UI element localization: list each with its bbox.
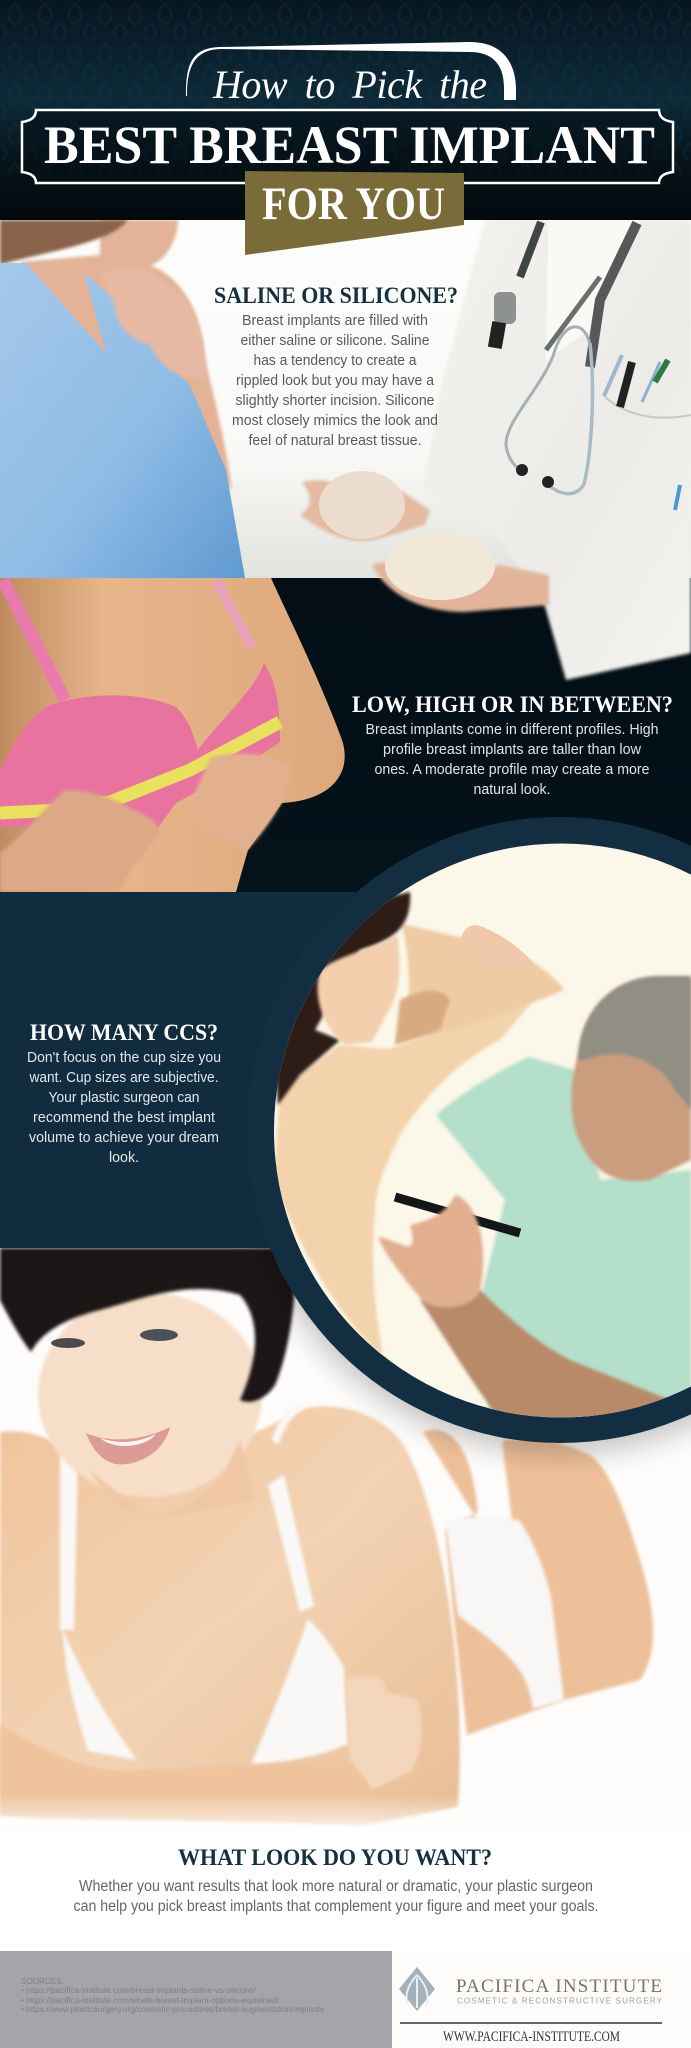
surgeon head (571, 978, 691, 1181)
right hand (190, 754, 291, 850)
body copy: Don't focus on the cup size you (27, 1049, 221, 1066)
eyes and mouth (51, 1329, 178, 1464)
script line: How to Pick the (212, 62, 487, 107)
body copy: volume to achieve your dream (29, 1129, 219, 1146)
left hand (0, 790, 159, 892)
text block: saline or silicone (214, 283, 458, 449)
surgeon forearm (420, 1290, 670, 1420)
body copy (27, 1049, 221, 1166)
text block: low, high or in between (352, 692, 673, 798)
body copy: profile breast implants are taller than low (383, 741, 641, 758)
body copy: feel of natural breast tissue. (248, 432, 422, 449)
body copy: ones. A moderate profile may create a more (374, 761, 650, 778)
body copy (74, 1878, 598, 1915)
photo: nurse in blue scrubs (0, 220, 245, 578)
measuring tape (0, 722, 280, 813)
skin (0, 578, 345, 892)
panel: section two dark background (0, 578, 691, 892)
marker pen (395, 1197, 520, 1233)
hair (0, 220, 128, 265)
sources list: • https://www.plasticsurgery.org/cosmetic-procedures/breast-augmentation/implants (21, 2004, 324, 2014)
sources list (21, 1976, 324, 2014)
body copy: either saline or silicone. Saline (240, 332, 430, 349)
panel: section one photo background (0, 220, 691, 578)
text block: what look do you want (74, 1845, 598, 1915)
body copy: rippled look but you may have a (236, 372, 435, 389)
body copy: has a tendency to create a (254, 352, 417, 369)
far arm (395, 991, 450, 1045)
body copy: recommend the best implant (33, 1109, 216, 1126)
hair (0, 1248, 296, 1402)
gold banner (245, 171, 464, 255)
hand (100, 267, 207, 379)
surgeon hair (578, 976, 691, 1110)
title plaque: best breast implant (22, 110, 673, 183)
body copy (232, 312, 438, 449)
body copy: natural look. (474, 781, 550, 798)
smooth implant (319, 471, 405, 539)
surgeon hand (378, 1195, 483, 1307)
body copy (366, 721, 658, 798)
straps (3, 580, 65, 700)
body copy: Your plastic surgeon can (48, 1089, 200, 1106)
pocket and pens (604, 355, 691, 510)
stethoscope (488, 222, 637, 494)
body copy: can help you pick breast implants that complement your figure and meet your goals. (74, 1898, 598, 1915)
heading: SALINE OR SILICONE? (214, 283, 458, 308)
hand on arm (460, 925, 533, 964)
torso and arm (0, 1406, 460, 1825)
body copy: Whether you want results that look more natural or dramatic, your plastic surgeon (79, 1878, 593, 1895)
hand holding smooth implant (300, 480, 430, 541)
white briefs (445, 1516, 564, 1709)
photo: smiling woman lying on a bed (0, 1248, 656, 1826)
patient back (274, 990, 542, 1356)
panel: how many ccs (0, 892, 400, 1248)
legs (423, 1430, 653, 1735)
heading: HOW MANY CCS? (30, 1020, 218, 1045)
shirt (546, 220, 640, 360)
body copy: slightly shorter incision. Silicone (236, 392, 434, 409)
logo name: PACIFICA INSTITUTE (456, 1976, 662, 1997)
bed fade (0, 1798, 458, 1828)
body copy: want. Cup sizes are subjective. (29, 1069, 218, 1086)
divider (400, 2022, 662, 2024)
icon: diamond emblem (399, 1967, 435, 2011)
blue scrubs (0, 263, 245, 578)
logo: pacifica institute (399, 1967, 663, 2045)
grey background (0, 1951, 392, 2048)
patient hair (270, 892, 410, 1105)
hand holding gel implant (372, 563, 549, 612)
circle drop shadow (254, 1248, 691, 1468)
text block: how many ccs (27, 1020, 221, 1166)
body copy: look. (109, 1149, 139, 1166)
surgeon scrubs (436, 1057, 691, 1425)
plaque text: BEST BREAST IMPLANT (44, 115, 655, 175)
damask pattern overlay (0, 0, 691, 175)
section: what look do you want, white background (0, 1248, 691, 2048)
panel: header band (0, 0, 691, 220)
sources list: • https://pacifica-institute.com/breast-implants-saline-vs-silicone/ (21, 1985, 257, 1995)
raised arm (395, 924, 564, 1040)
body copy: Breast implants are filled with (242, 312, 428, 329)
pink garment (0, 663, 280, 833)
title banner: for you (245, 171, 464, 255)
sources list: • https://pacifica-institute.com/whats-breast-implant-options-explained/ (21, 1995, 280, 2005)
photo: torso and measuring tape (0, 578, 345, 892)
white coat (423, 220, 691, 680)
white garment (60, 1404, 348, 1764)
gel implant (385, 532, 495, 600)
face (38, 1293, 262, 1497)
heading: WHAT LOOK DO YOU WANT? (178, 1845, 492, 1870)
logo tagline: COSMETIC & RECONSTRUCTIVE SURGERY (457, 1996, 663, 2006)
title: how to pick the (186, 42, 516, 107)
body copy: Breast implants come in different profiles. High (366, 721, 658, 738)
skin (20, 220, 232, 490)
patient face (318, 935, 400, 1045)
panel: sources (0, 1951, 392, 2048)
sources list: SOURCES: (21, 1976, 64, 1986)
banner text: FOR YOU (262, 178, 445, 230)
body copy: most closely mimics the look and (232, 412, 438, 429)
arch frame (186, 42, 516, 100)
hand and shading (345, 1676, 421, 1790)
circle frame ring (247, 817, 691, 1443)
photo: doctor in white coat holding implants (300, 220, 691, 680)
cream room (270, 840, 691, 1425)
plaque frame (22, 110, 673, 183)
heading: LOW, HIGH OR IN BETWEEN? (352, 692, 673, 717)
website: WWW.PACIFICA-INSTITUTE.COM (443, 2029, 620, 2045)
photo: surgeon marking patient inside circle (270, 840, 691, 1425)
